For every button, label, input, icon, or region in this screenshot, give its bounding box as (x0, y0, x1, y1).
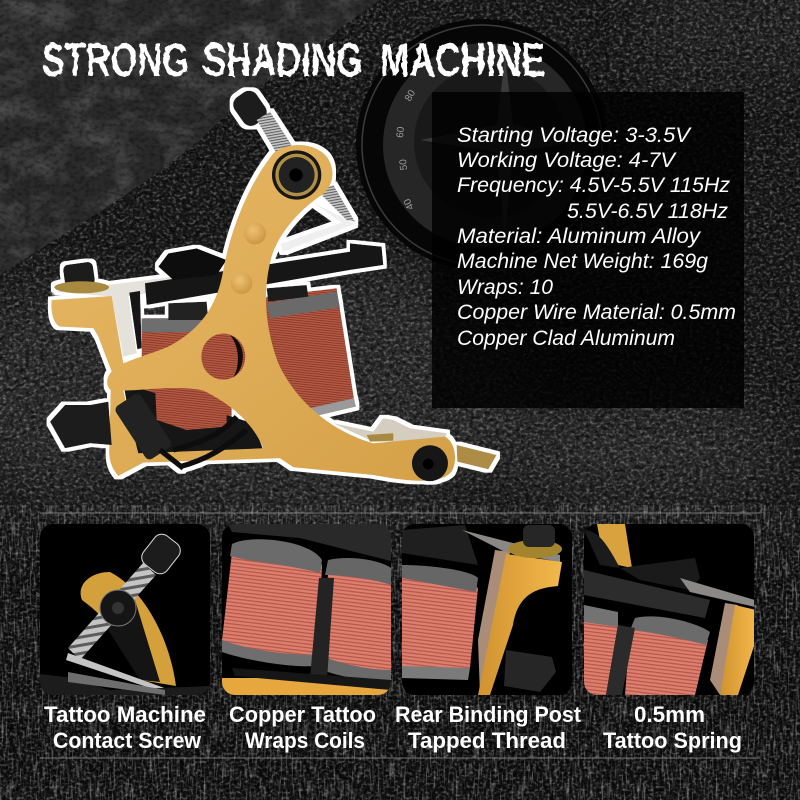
gold bracket (478, 554, 562, 695)
front spring plate (55, 270, 227, 357)
dark backing panel behind specifications (432, 92, 744, 408)
dark inner fill (123, 383, 263, 460)
background: floral leather panel (0, 0, 380, 274)
knob (141, 534, 181, 574)
specifications text block: Copper Clad Aluminum (457, 327, 675, 350)
background compass: 40 (402, 196, 417, 211)
caption: contact screw: Tattoo Machine (44, 702, 206, 727)
gold frame (51, 145, 455, 481)
caption: copper coils: Copper Tattoo (229, 702, 376, 727)
lower right screw (412, 445, 448, 481)
rear binding post (54, 261, 109, 293)
top screw (272, 150, 321, 200)
capacitor and wires (113, 392, 247, 468)
title: STRONG (42, 33, 189, 86)
contact spring (281, 202, 355, 252)
gold arm (81, 572, 176, 686)
caption: contact screw (44, 702, 206, 753)
armature bar (145, 243, 383, 305)
rear spring plate (333, 418, 447, 442)
detail photo: rear binding post (402, 524, 572, 695)
adjusting contact screw (229, 87, 355, 222)
plate slot (129, 291, 142, 349)
background compass: 60 (395, 126, 407, 138)
specifications text block: Frequency: 4.5V-5.5V 115Hz (457, 174, 731, 197)
tattoo machine product image (50, 87, 497, 481)
detail photo: copper wrap coils (222, 524, 391, 695)
coils (142, 285, 356, 427)
caption: contact screw: Contact Screw (53, 728, 202, 753)
title: MACHINE (380, 33, 545, 86)
specifications text block: Machine Net Weight: 169g (457, 250, 708, 273)
caption: copper coils (229, 702, 376, 753)
rear brass bracket and washer (367, 433, 497, 469)
background compass: 80 (403, 88, 418, 104)
specifications text block: Starting Voltage: 3-3.5V (457, 124, 692, 147)
title: SHADING (203, 33, 363, 86)
caption: spring: 0.5mm (634, 702, 705, 727)
background compass (356, 19, 608, 271)
screw thread (68, 563, 156, 660)
rivets (231, 222, 266, 294)
caption: spring: Tattoo Spring (603, 728, 742, 753)
specifications text block: Working Voltage: 4-7V (457, 149, 677, 172)
title (42, 33, 545, 86)
divider lines (40, 513, 760, 758)
vise grip (504, 650, 556, 692)
specifications text block (457, 124, 736, 350)
black strap (105, 600, 160, 682)
caption: copper coils: Wraps Coils (245, 728, 365, 753)
knob and washer (508, 540, 562, 558)
caption: binding post: Tapped Thread (408, 728, 566, 753)
specifications text block: Copper Wire Material: 0.5mm (457, 301, 736, 324)
spring and armature (66, 653, 164, 688)
tube vise grip (50, 402, 112, 448)
detail photo: contact screw (40, 524, 210, 700)
detail photo: tattoo spring (584, 524, 756, 695)
caption: spring (603, 702, 742, 753)
caption: binding post: Rear Binding Post (395, 702, 582, 727)
coil seen through hole (201, 334, 245, 380)
hex nut (100, 590, 136, 626)
caption: binding post (395, 702, 582, 753)
background compass: 50 (398, 158, 410, 171)
specifications text block: Wraps: 10 (457, 276, 553, 299)
specifications text block: 5.5V-6.5V 118Hz (567, 200, 729, 223)
bottom coil (155, 385, 227, 430)
specifications text block: Material: Aluminum Alloy (457, 225, 702, 248)
